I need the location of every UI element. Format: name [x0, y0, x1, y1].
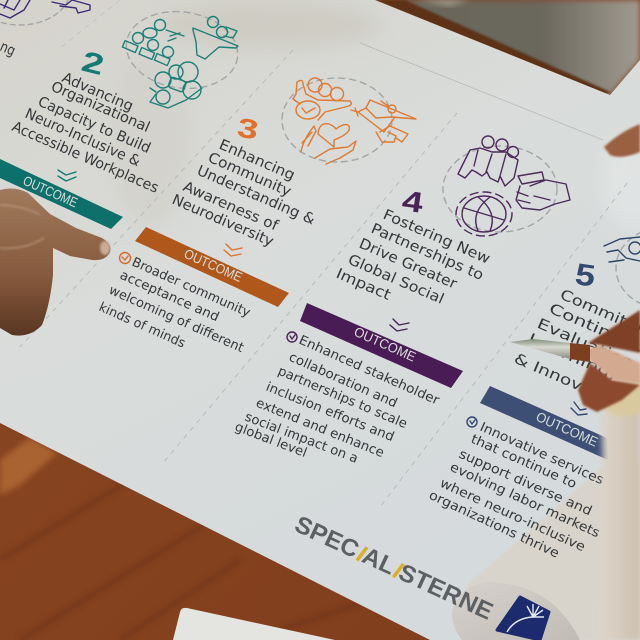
- panel: column 3: [96, 78, 416, 356]
- outcome bar 3: OUTCOME: [182, 246, 245, 285]
- outcome text 5: support diverse and: [456, 447, 594, 519]
- outcome text 5: evolving labor markets: [447, 460, 602, 541]
- outcome text 3: acceptance and: [117, 268, 221, 325]
- panel: column 4: [233, 136, 570, 467]
- hand holding pen: [578, 310, 640, 412]
- rolled paper shadow under text: [467, 460, 640, 640]
- number 5: 5: [573, 258, 597, 294]
- outcome text 4: global level: [233, 420, 309, 461]
- heading 4: Fostering New: [380, 207, 492, 268]
- outcome bar 4: [300, 303, 463, 388]
- outcome text 5: organizations thrive: [426, 488, 561, 562]
- number 3: 3: [235, 111, 261, 145]
- outcome text 3: [96, 255, 253, 356]
- outcome text 4: collaboration and: [286, 350, 399, 411]
- heading 4: [333, 207, 492, 308]
- number 4: 4: [400, 185, 426, 220]
- paper shading: [110, 1, 640, 230]
- outcome text 5: [426, 420, 606, 562]
- outcome text 4: social impact on a: [243, 410, 360, 467]
- outcome text 3: welcoming of different: [106, 283, 246, 356]
- chevrons 5: [571, 402, 587, 415]
- heading 3: Understanding &: [194, 163, 317, 228]
- chevrons 2: [58, 170, 76, 181]
- heading 5: & Innovation: [511, 351, 628, 414]
- logo wordmark: SPECIALISTERNE: [290, 511, 497, 627]
- heading 2: Neuro-Inclusive &: [22, 106, 143, 170]
- column 1 fragment: [0, 0, 90, 60]
- blurred chair at top right: [375, 0, 640, 96]
- outcome text 5: Innovative services: [477, 420, 606, 488]
- outcome bar 2: [0, 159, 123, 229]
- outcome text 4: extend and enhance: [254, 396, 386, 461]
- heading 4: Impact: [333, 266, 393, 304]
- blurred foreground sleeve: [590, 370, 640, 640]
- outcome text 4: partnerships to scale: [275, 364, 409, 432]
- heading 2: Organizational: [48, 79, 152, 136]
- outcome icon 5: [467, 417, 477, 427]
- heading 2: Capacity to Build: [35, 94, 153, 157]
- hand pointing from left: [0, 189, 110, 336]
- outcome text 5: where neuro-inclusive: [437, 476, 587, 555]
- logo mark: dandelion: [497, 597, 549, 640]
- heading 5: Evaluation,: [534, 316, 640, 375]
- chevrons 3: [224, 244, 242, 256]
- outcome text 5: that continue to: [468, 432, 579, 492]
- heading 5: Learning,: [525, 331, 619, 384]
- outcome bar 3: [135, 227, 289, 307]
- heading 5: [511, 287, 640, 414]
- heading 4: Drive Greater: [356, 236, 459, 293]
- outcome bar 5: OUTCOME: [534, 409, 600, 450]
- white card on table: [173, 608, 335, 640]
- blurred yellow highlight: [601, 380, 640, 416]
- outcome icon 3: [120, 252, 130, 264]
- column 1 icons: [0, 0, 90, 25]
- heading 3: Awareness of: [180, 179, 281, 235]
- heading 2: Accessible Workplaces: [9, 119, 161, 197]
- number 2: 2: [78, 46, 107, 82]
- rolled paper curl: [452, 582, 580, 640]
- outcome bar 5: [480, 386, 608, 460]
- column dividers: [20, 0, 627, 507]
- fold line: [360, 43, 603, 140]
- icon: teal capacity icons: [121, 5, 243, 108]
- panel: column 2: [0, 5, 243, 229]
- heading 3: Enhancing: [216, 137, 297, 184]
- heading 3: Community: [205, 150, 294, 200]
- outcome bar 2: OUTCOME: [21, 173, 80, 210]
- heading 4: Global Social: [345, 252, 446, 308]
- outcome icon 4: [287, 332, 297, 342]
- heading 2: [9, 70, 161, 197]
- outcome bar 4: OUTCOME: [352, 324, 418, 365]
- panel: column 5: [426, 228, 640, 562]
- icon: navy innovation icons: [604, 228, 640, 308]
- icon: orange community icons: [282, 78, 416, 164]
- outcome text 4: [233, 333, 442, 467]
- outcome text 4: inclusion efforts and: [264, 380, 396, 445]
- chevrons 4: [390, 319, 409, 331]
- heading 4: Partnerships to: [368, 221, 486, 284]
- heading 3: [169, 137, 317, 250]
- heading 2: Advancing: [59, 70, 135, 115]
- outcome text 4: Enhanced stakeholder: [296, 333, 442, 409]
- heading 5: Continuous: [546, 301, 640, 362]
- heading 3: Neurodiversity: [169, 192, 276, 250]
- blurred finger at top right: [604, 124, 640, 157]
- icon: purple partnership icons: [443, 136, 570, 236]
- outcome text 3: Broader community: [129, 255, 253, 321]
- pen: [510, 339, 590, 362]
- outcome text 3: kinds of minds: [96, 300, 188, 352]
